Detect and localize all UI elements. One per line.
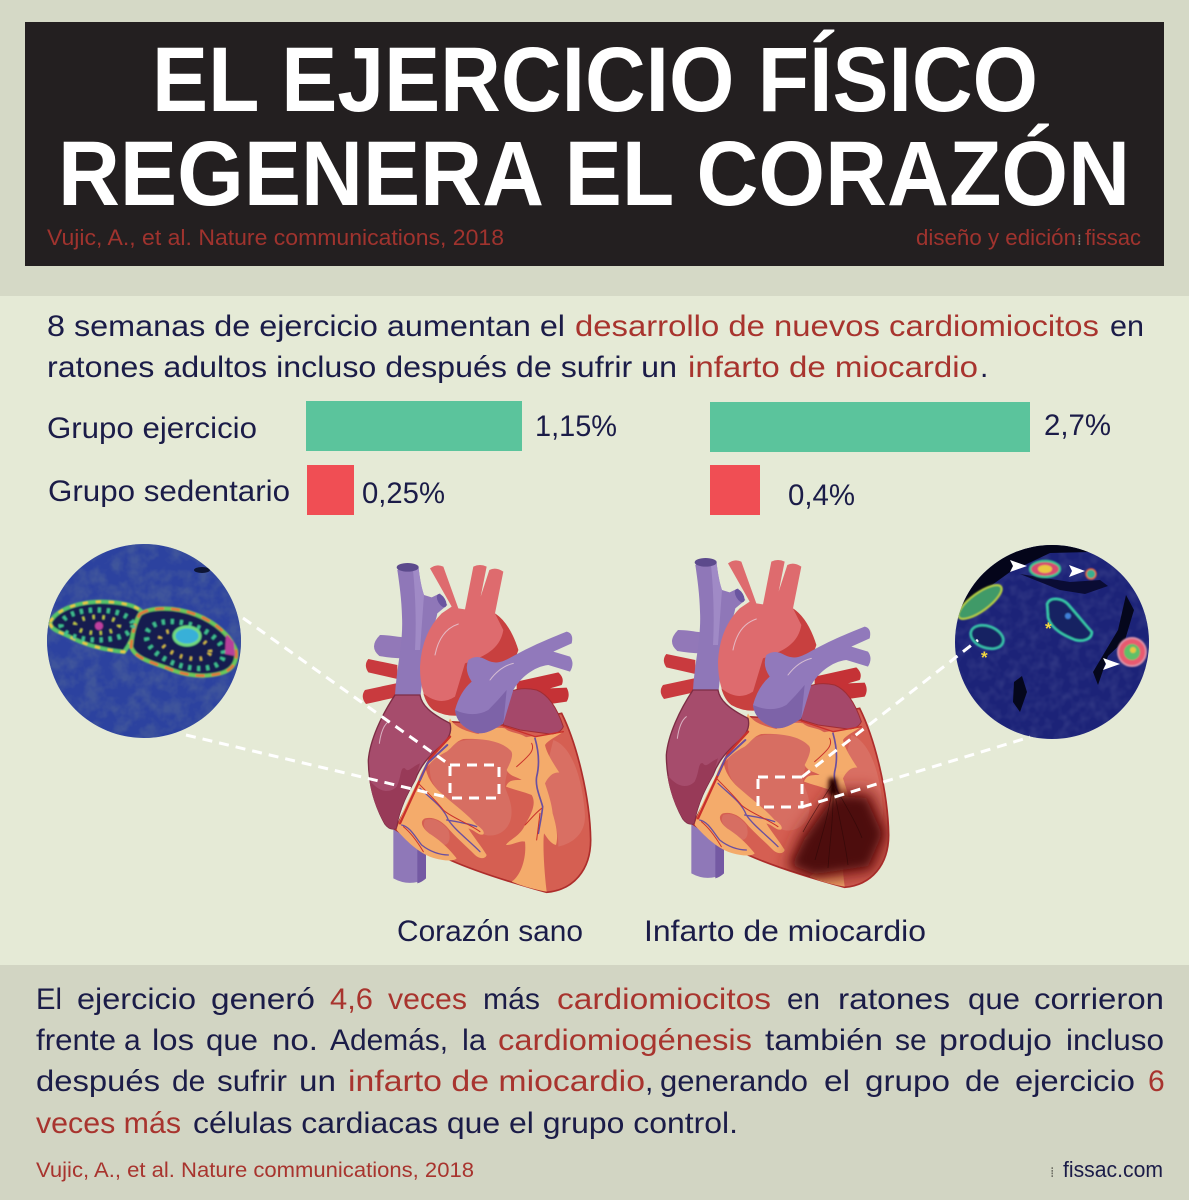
intro text: 8 semanas de ejercicio aumentan el xyxy=(47,310,565,343)
yellow asterisks: * xyxy=(1045,619,1052,638)
design credit: fissac xyxy=(1085,225,1141,250)
design credit: diseño y edición xyxy=(916,225,1076,250)
conclusion text: no. xyxy=(272,1024,318,1057)
yellow asterisks xyxy=(981,619,1052,667)
conclusion text: 6 xyxy=(1148,1065,1165,1098)
conclusion text: infarto de miocardio xyxy=(348,1065,645,1098)
intro text xyxy=(47,310,1144,384)
bar chart xyxy=(47,401,1111,515)
bar: ejercicio 2,7% xyxy=(710,402,1030,452)
design credit: ⁞ xyxy=(1077,231,1082,249)
intro text: . xyxy=(980,351,988,384)
conclusion text: ejercicio xyxy=(77,983,196,1016)
value: 0,4% xyxy=(788,479,855,512)
bar: ejercicio 1,15% xyxy=(306,401,522,451)
value: 1,15% xyxy=(535,410,617,443)
micrograph: healthy tissue xyxy=(47,544,241,738)
conclusion text: cardiomiocitos xyxy=(557,983,771,1016)
value: 2,7% xyxy=(1044,409,1111,442)
conclusion text: se xyxy=(895,1024,927,1057)
conclusion text: frente xyxy=(36,1024,116,1057)
label: grupo sedentario: Grupo sedentario xyxy=(48,475,290,508)
white arrows xyxy=(1010,560,1120,670)
zoom callout: infarct xyxy=(758,640,1030,807)
yellow asterisks: * xyxy=(981,648,988,667)
source citation: Vujic, A., et al. Nature communications, 2018 xyxy=(47,225,504,250)
conclusion text: la xyxy=(462,1024,486,1057)
caption: healthy heart: Corazón sano xyxy=(397,915,583,948)
conclusion text: veces xyxy=(388,983,467,1016)
panel: header band xyxy=(0,0,1189,296)
conclusion text: de xyxy=(172,1065,205,1098)
value: 0,25% xyxy=(362,477,445,510)
conclusion text: Además, xyxy=(330,1024,448,1057)
conclusion text: sufrir xyxy=(217,1065,287,1098)
intro text: en xyxy=(1110,310,1144,343)
intro text: ratones adultos incluso después de sufrir un xyxy=(47,351,677,384)
intro text: desarrollo de nuevos cardiomiocitos xyxy=(575,310,1099,343)
conclusion text: generó xyxy=(211,983,315,1016)
conclusion text: 4,6 xyxy=(330,983,373,1016)
conclusion text: que xyxy=(968,983,1020,1016)
conclusion text: generando xyxy=(660,1065,808,1098)
conclusion text xyxy=(36,983,1165,1140)
bar: sedentario 0,4% xyxy=(710,465,760,515)
footer credit: fissac.com xyxy=(1063,1157,1163,1182)
bar: sedentario 0,25% xyxy=(307,465,354,515)
title xyxy=(58,28,1130,225)
conclusion text: después xyxy=(36,1065,160,1098)
conclusion text: más xyxy=(483,983,540,1016)
conclusion text: que xyxy=(206,1024,258,1057)
infarct damage xyxy=(785,778,892,882)
conclusion text: , xyxy=(645,1065,653,1098)
conclusion text: un xyxy=(299,1065,336,1098)
conclusion text: produjo xyxy=(939,1024,1052,1057)
zoom callout: healthy xyxy=(186,618,499,798)
panel: footer band xyxy=(0,965,1189,1200)
conclusion text: células cardiacas que el grupo control. xyxy=(193,1107,738,1140)
panel: title box xyxy=(25,22,1164,266)
conclusion text: grupo xyxy=(865,1065,950,1098)
footer credit: ⁞ xyxy=(1050,1165,1054,1181)
conclusion text: también xyxy=(765,1024,883,1057)
conclusion text: cardiomiogénesis xyxy=(498,1024,752,1057)
icon: infarcted heart xyxy=(661,558,892,887)
icon: healthy heart xyxy=(363,563,591,892)
conclusion text: a xyxy=(124,1024,141,1057)
conclusion text: en xyxy=(787,983,820,1016)
conclusion text: corrieron xyxy=(1034,983,1164,1016)
conclusion text: El xyxy=(36,983,62,1016)
conclusion text: veces más xyxy=(36,1107,181,1140)
conclusion text: los xyxy=(152,1024,194,1057)
caption: infarct: Infarto de miocardio xyxy=(644,915,926,948)
micrograph: infarcted tissue xyxy=(954,545,1149,739)
title: EL EJERCICIO FÍSICO xyxy=(152,28,1038,131)
label: grupo ejercicio: Grupo ejercicio xyxy=(47,412,257,445)
conclusion text: incluso xyxy=(1066,1024,1164,1057)
conclusion text: ratones xyxy=(838,983,950,1016)
footer citation: Vujic, A., et al. Nature communications, 2018 xyxy=(36,1159,474,1182)
conclusion text: el xyxy=(824,1065,850,1098)
intro text: infarto de miocardio xyxy=(688,351,978,384)
conclusion text: ejercicio xyxy=(1015,1065,1135,1098)
conclusion text: de xyxy=(965,1065,1000,1098)
panel: content background xyxy=(0,296,1189,965)
title: REGENERA EL CORAZÓN xyxy=(58,122,1130,225)
